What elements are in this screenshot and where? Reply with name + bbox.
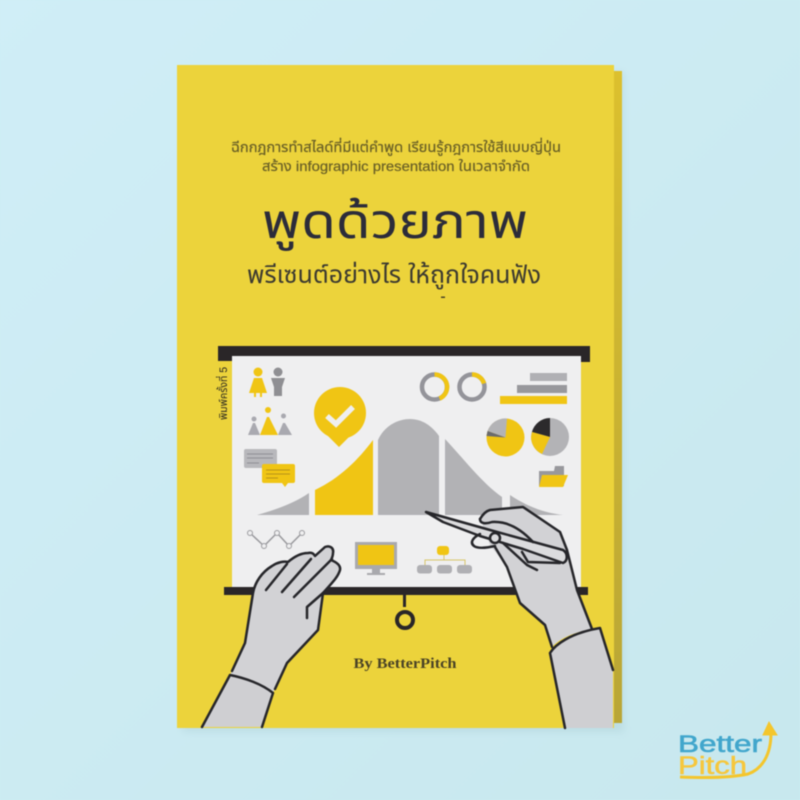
pie chart dark <box>531 418 569 456</box>
tagline <box>231 137 561 174</box>
tagline: ฉีกกฎการทำสไลด์ที่มีแต่คำพูด เรียนรู้กฎการใช้สีแบบญี่ปุ่น <box>231 137 561 156</box>
book title: พูดด้วยภาพ <box>262 196 528 251</box>
right hand with pencil <box>426 507 613 728</box>
icon: folder <box>539 466 568 487</box>
top roller <box>218 346 590 362</box>
finger lines <box>266 559 332 618</box>
book back pages <box>610 71 622 723</box>
logo arrow <box>680 722 777 778</box>
left palm and fingers <box>230 546 340 693</box>
author credit: By BetterPitch <box>354 656 457 672</box>
pull cord <box>397 595 413 628</box>
pencil <box>426 512 567 563</box>
BetterPitch logo <box>678 722 777 780</box>
projector screen <box>218 346 590 628</box>
fingers <box>472 519 560 570</box>
bottom bar <box>224 587 588 595</box>
finger ring <box>490 533 500 543</box>
icon: org chart <box>417 546 472 574</box>
icon: people <box>249 368 285 397</box>
pie chart yellow <box>486 418 524 456</box>
book front cover <box>177 65 614 728</box>
donut charts <box>422 374 484 400</box>
right sleeve <box>550 628 613 728</box>
logo word Pitch: Pitch <box>678 752 747 780</box>
line chart <box>248 530 304 548</box>
icon: monitor <box>355 542 397 575</box>
bar chart <box>500 373 567 404</box>
right palm <box>480 507 592 647</box>
left hand <box>202 546 340 727</box>
icon: team triangles <box>248 407 292 435</box>
subtitle: พรีเซนต์อย่างไร ให้ถูกใจคนฟัง <box>247 261 541 290</box>
left sleeve <box>202 675 273 727</box>
edition label: พิมพ์ครั้งที่ 5 <box>215 367 230 420</box>
tagline: สร้าง infographic presentation ในเวลาจำกัด <box>262 158 530 174</box>
book shadow <box>182 72 624 732</box>
icon: speech bubbles <box>244 449 295 487</box>
screen surface <box>232 356 581 588</box>
icon: check badge <box>314 387 366 447</box>
bell curve chart <box>257 419 563 515</box>
logo word Better: Better <box>678 731 762 758</box>
book <box>177 65 624 732</box>
stray mark under subtitle <box>441 296 445 298</box>
